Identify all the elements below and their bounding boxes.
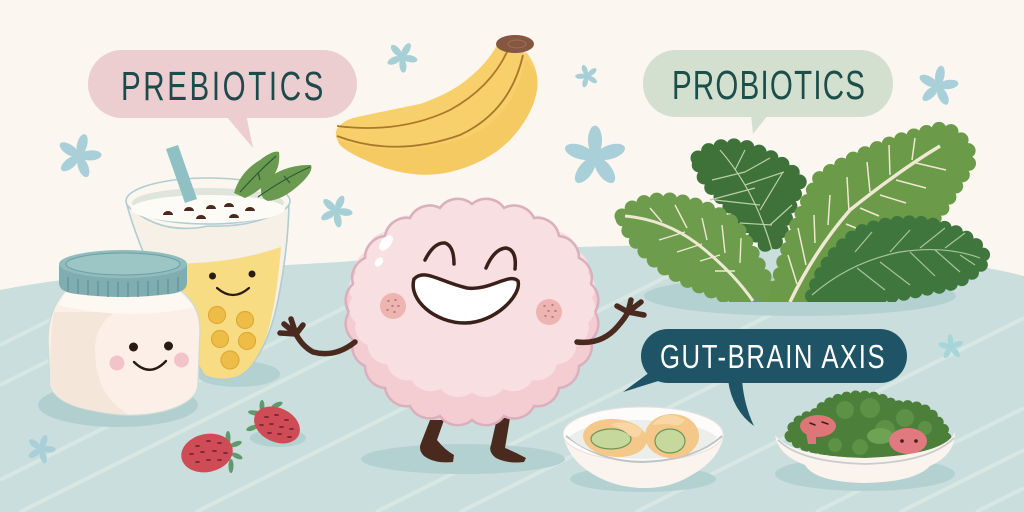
- flower: large centre: [563, 126, 627, 187]
- flower: near probiotics left: [572, 61, 602, 91]
- big right leaf: [775, 128, 969, 302]
- prebiotics speech bubble: [88, 50, 357, 148]
- character body: [346, 199, 598, 425]
- pink bites: [800, 415, 927, 454]
- right bowl: [775, 396, 955, 491]
- flower: right on table: [937, 333, 965, 360]
- boba pearls: [208, 306, 256, 369]
- jar face: [110, 342, 189, 370]
- prebiotics label: PREBIOTICS: [121, 63, 323, 109]
- flower: top right: [914, 62, 962, 109]
- jar lid: [59, 250, 187, 297]
- character outline top: [346, 199, 598, 312]
- left bowl: [563, 407, 724, 492]
- straw: [166, 145, 197, 203]
- flower: above character: [314, 189, 358, 232]
- right bowl body: [775, 432, 955, 483]
- character legs: [420, 418, 526, 462]
- right bowl shadow: [775, 457, 955, 491]
- cup shadow: [196, 361, 280, 387]
- flower: above banana: [381, 35, 424, 78]
- character shadow: [361, 444, 565, 474]
- flower: top left: [51, 128, 107, 182]
- back dark leaf: [698, 146, 800, 250]
- smoothie cup: [126, 145, 311, 387]
- mint sprig: [234, 152, 311, 201]
- character arms: [280, 300, 644, 354]
- cup body: [127, 205, 289, 379]
- character eyes: [425, 243, 515, 269]
- jar side shade: [50, 312, 128, 414]
- banana: [336, 35, 538, 175]
- jar body: [48, 290, 200, 415]
- left bowl body: [563, 434, 724, 488]
- jar shadow: [38, 383, 198, 427]
- front dark leaf: [812, 222, 985, 302]
- pastry left: [581, 416, 649, 460]
- yogurt jar: [38, 250, 200, 427]
- chocolate sprinkles: [163, 203, 255, 219]
- character cheeks: [380, 293, 562, 325]
- banana stem: [496, 35, 534, 53]
- character face area: [349, 199, 595, 397]
- leaves: [622, 128, 985, 316]
- salad greens: [790, 396, 946, 455]
- probiotics speech bubble: [643, 50, 893, 134]
- left bowl shadow: [570, 466, 716, 492]
- pastry right: [645, 414, 699, 458]
- gut-brain axis label: GUT-BRAIN AXIS: [660, 339, 885, 376]
- probiotics label: PROBIOTICS: [672, 62, 865, 108]
- gut character: [280, 199, 644, 474]
- cup face: [209, 270, 256, 295]
- juice: [148, 247, 281, 379]
- jar highlight: [58, 292, 194, 314]
- leaf shadow: [644, 276, 956, 316]
- character smile: [413, 275, 518, 323]
- flower: bottom left: [22, 430, 60, 467]
- character highlights: [373, 233, 396, 268]
- gut-brain axis speech bubble: [623, 329, 907, 426]
- table surface: [0, 246, 1024, 512]
- strawberry: lower: [178, 429, 243, 477]
- left leaf: [622, 200, 775, 301]
- cup rim and foam: [126, 178, 290, 224]
- strawberry: upper: [246, 399, 306, 451]
